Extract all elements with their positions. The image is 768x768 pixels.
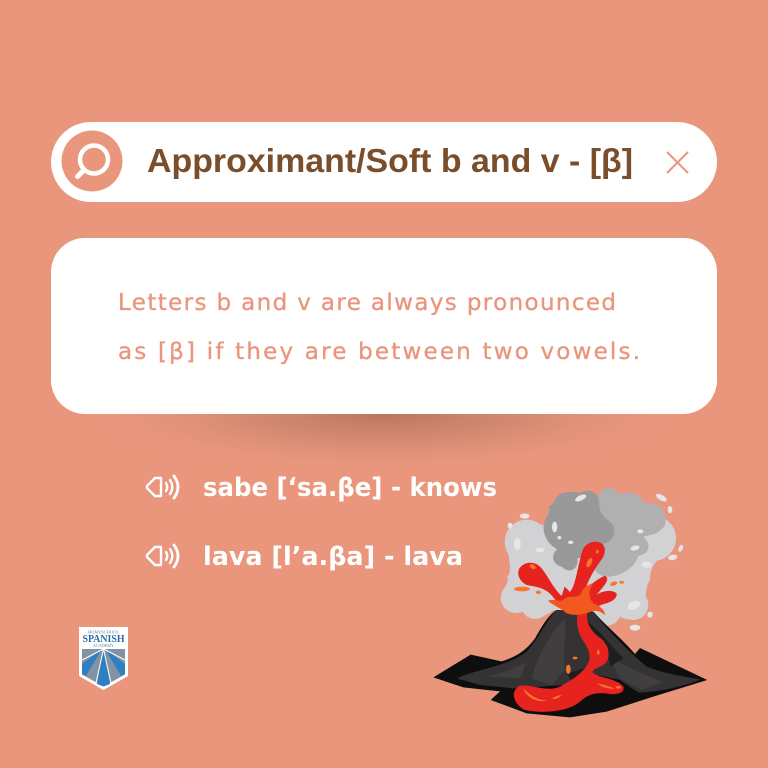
heading: Approximant/Soft b and v - [β] [147, 142, 633, 179]
lava fountain [518, 542, 617, 614]
text: rule line 1: Letters b and v are always pronounced [118, 290, 616, 316]
rock shading [487, 618, 663, 690]
illustration: erupting volcano [433, 488, 707, 717]
icon: close [667, 152, 688, 173]
light smoke cloud [501, 513, 676, 625]
logo: Spanish academy shield [79, 627, 128, 690]
logo: Spanish academy shield: SPANISH [82, 634, 125, 645]
volcano rock [457, 611, 701, 693]
smoke highlights [508, 492, 684, 631]
card shadow [84, 356, 684, 472]
logo: Spanish academy shield: ACADEMY [93, 643, 114, 648]
example: lava [147, 542, 463, 572]
icon: speaker [147, 476, 178, 498]
lava fountain glow [548, 583, 605, 615]
left dark smoke cloud [544, 491, 614, 570]
logo: Spanish academy shield: HOMESCHOOL [88, 630, 119, 634]
lava droplets [514, 550, 624, 594]
search bar [51, 122, 717, 202]
text: rule line 2: as [β] if they are between two vowels. [118, 339, 640, 365]
icon: speaker [147, 545, 178, 567]
volcano black base [433, 610, 707, 717]
text: lava: lava [lʼa.βa] - lava [203, 542, 463, 572]
panel: rule explanation [51, 238, 717, 414]
right dark smoke cloud [593, 488, 666, 577]
lava flow [514, 613, 624, 712]
text: sabe: sabe [ʻsa.βe] - knows [203, 473, 497, 503]
icon: magnifying glass [62, 130, 122, 192]
example: sabe [147, 473, 497, 503]
lava highlights [523, 650, 621, 701]
